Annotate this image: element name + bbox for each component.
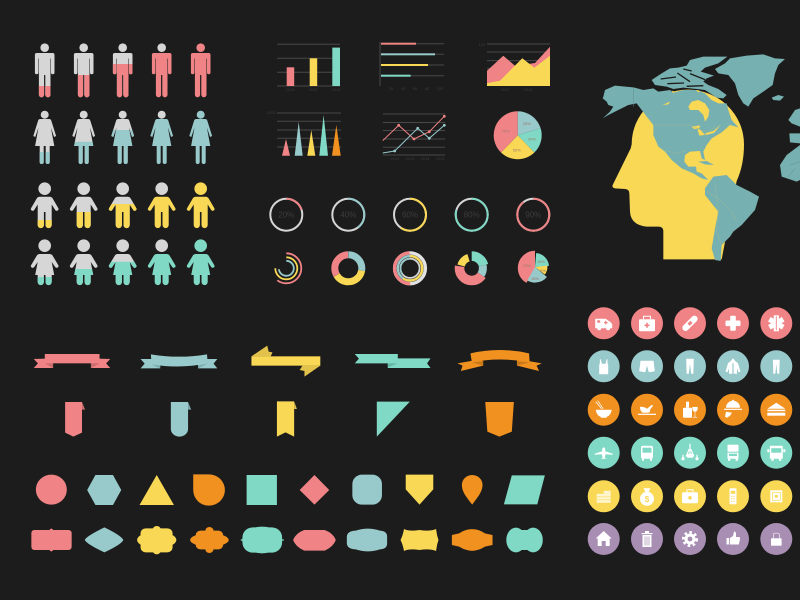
exploded donut chart: [460, 256, 484, 280]
horizontal bar chart: 80: [425, 86, 430, 91]
bar chart: 2015: [309, 87, 318, 92]
icon: roast turkey: [631, 394, 663, 426]
panel: male pictograms: [35, 43, 211, 97]
radial arc chart: [271, 253, 301, 283]
exploded pie chart: 18%: [537, 259, 545, 264]
gauge 20 percent: [270, 199, 302, 231]
triangle chart: 1000: [267, 110, 276, 115]
icon: bus front: [631, 437, 663, 469]
icon: card terminal: [717, 480, 749, 512]
panel: boy pictograms: [31, 182, 215, 228]
gauge 20 percent: 20%: [278, 210, 294, 220]
icon: bottle and glass: [674, 394, 706, 426]
badge: pink plaque: [31, 528, 72, 552]
shape: pentagon: [406, 475, 433, 505]
shape: square: [247, 475, 277, 505]
icon: boy 40 percent: [70, 182, 98, 228]
ribbon: orange arch: [457, 350, 542, 371]
icon: jacket: [717, 350, 749, 382]
icon: ambulance: [588, 307, 620, 339]
gauge 80 percent: [456, 199, 488, 231]
bar chart: 2016: [332, 87, 341, 92]
map: lakes and bays: [663, 90, 721, 136]
exploded pie chart: 8%: [540, 268, 546, 273]
icon: slim trousers: [760, 350, 792, 382]
icon: medical cross: [717, 307, 749, 339]
icon: woman 80 percent: [150, 111, 173, 164]
gauge 40 percent: [332, 199, 364, 231]
panel: medical icons: [588, 301, 792, 346]
area chart: 100: [479, 42, 486, 47]
icon: coach front: [760, 437, 792, 469]
icon: trousers: [674, 350, 706, 382]
panel: ribbons: [34, 346, 542, 437]
pie chart: 50%: [513, 148, 521, 152]
icon: woman 100 percent: [189, 111, 212, 164]
exploded pie chart: [523, 259, 546, 281]
icon: briefcase: [674, 480, 706, 512]
panel: female pictograms: [33, 111, 212, 164]
donut chart: [335, 255, 362, 282]
icon: trash can: [631, 523, 663, 555]
ribbon: blue curved: [141, 354, 217, 368]
horizontal bar chart: 40: [401, 86, 406, 91]
shape: parallelogram: [504, 475, 545, 504]
shape: hexagon: [87, 475, 121, 505]
map: continents: [603, 54, 800, 261]
bookmark: pink: [65, 402, 85, 437]
shape: rounded square: [352, 475, 382, 505]
exploded pie chart: 70%: [523, 263, 531, 268]
line chart: 2014: [421, 156, 430, 161]
shape: triangle: [140, 475, 174, 505]
area chart: [479, 42, 550, 92]
shape: circle: [36, 475, 67, 505]
map: borders: [633, 88, 800, 245]
icon: first aid kit: [631, 307, 663, 339]
icon: shorts: [631, 350, 663, 382]
icon: woman 40 percent: [72, 111, 95, 164]
exploded pie chart: 18%: [531, 276, 539, 281]
badge: yellow scallop: [137, 526, 176, 554]
ribbon: yellow arrow fold: [251, 346, 320, 377]
area chart: 2014: [524, 87, 533, 92]
badge: yellow ticket: [401, 529, 438, 551]
ribbon: teal step: [355, 354, 431, 368]
map: arctic islands: [652, 57, 727, 98]
area chart: 2012: [501, 87, 510, 92]
icon: woman 20 percent: [33, 111, 56, 164]
panel: shapes: [31, 474, 545, 554]
panel: girl pictograms: [31, 239, 215, 285]
icon: money bag: $: [645, 495, 650, 504]
gauge 90 percent: 90%: [525, 210, 541, 220]
icon: truck front: [717, 437, 749, 469]
gauge 60 percent: [394, 199, 426, 231]
badge: blue barrel: [347, 529, 387, 551]
icon: stacks of money: [588, 480, 620, 512]
panel: transport icons: [588, 437, 792, 469]
shape: teardrop: [462, 475, 483, 505]
panel: finance icons: [588, 480, 792, 512]
icon: sandwich: [760, 394, 792, 426]
icon: boy 100 percent: [187, 182, 215, 228]
horizontal bar chart: [380, 42, 444, 91]
badge: orange scallop: [190, 527, 229, 553]
icon: woman 60 percent: [111, 111, 134, 164]
line chart: [383, 114, 446, 161]
icon: man 20 percent: [35, 43, 54, 97]
icon: airplane: [588, 437, 620, 469]
shape: diamond: [300, 475, 329, 505]
badge: teal oval plaque: [241, 527, 284, 553]
icon: money bag: [631, 480, 663, 512]
panel: interface icons: [588, 523, 792, 555]
pie chart: 30%: [528, 136, 536, 142]
icon: boy 20 percent: [31, 182, 59, 228]
badge: blue lozenge: [85, 527, 123, 552]
bookmark: orange shield: [485, 402, 514, 437]
icon: boy 80 percent: [148, 182, 176, 228]
ribbon: pink flat: [34, 354, 110, 368]
bar chart: 2014: [286, 87, 295, 92]
shape: rounded leaf: [193, 474, 225, 506]
icon: man 100 percent: [191, 43, 210, 97]
icon: man 80 percent: [152, 43, 172, 97]
badge: pink pointed plaque: [293, 530, 336, 551]
bookmark: teal corner: [377, 402, 410, 437]
icon: noodle bowl: [588, 394, 620, 426]
icon: forklift: [674, 437, 706, 469]
icon: man 60 percent: [113, 43, 132, 97]
icon: tank top: [588, 350, 620, 382]
head and world map: [603, 54, 800, 261]
icon: boy 60 percent: [109, 182, 137, 228]
pie chart: [494, 111, 542, 159]
panel: clothing icons: [588, 350, 792, 382]
icon: girl 20 percent: [31, 239, 59, 285]
gauge 80 percent: 80%: [464, 210, 480, 220]
gauge 60 percent: 60%: [402, 210, 418, 220]
pie chart: 70%: [502, 128, 510, 134]
gauge 90 percent: [517, 199, 549, 231]
badge: orange octagon oval: [452, 529, 493, 551]
horizontal bar chart: 60: [413, 86, 418, 91]
icon: serving cloche: [717, 394, 749, 426]
concentric ring chart: [395, 253, 425, 284]
icon: star of life: [760, 307, 792, 339]
icon: bandage: [667, 301, 713, 346]
horizontal bar chart: 20: [389, 86, 394, 91]
line chart: 2013: [406, 156, 415, 161]
badge: teal double lobe: [506, 528, 543, 552]
pie chart: 28%: [523, 121, 531, 126]
panel: food icons: [588, 394, 792, 426]
icon: girl 80 percent: [148, 239, 176, 285]
icon: girl 60 percent: [109, 239, 137, 285]
icon: home: [588, 523, 620, 555]
icon: girl 40 percent: [70, 239, 98, 285]
gauge 40 percent: 40%: [340, 210, 356, 220]
icon: settings gear: [674, 523, 706, 555]
triangle chart: [267, 110, 341, 156]
bookmark: blue: [171, 402, 191, 437]
bar chart: [277, 44, 341, 92]
icon: girl 100 percent: [187, 239, 215, 285]
icon: man 40 percent: [74, 43, 94, 97]
horizontal bar chart: 100: [437, 86, 444, 91]
line chart: 2012: [391, 156, 400, 161]
line chart: 2015: [436, 156, 445, 161]
bookmark: yellow: [277, 401, 297, 437]
icon: safe: [760, 480, 792, 512]
icon: head silhouette: [612, 90, 744, 259]
icon: shopping bag: [760, 523, 792, 555]
icon: thumbs up: [717, 523, 749, 555]
